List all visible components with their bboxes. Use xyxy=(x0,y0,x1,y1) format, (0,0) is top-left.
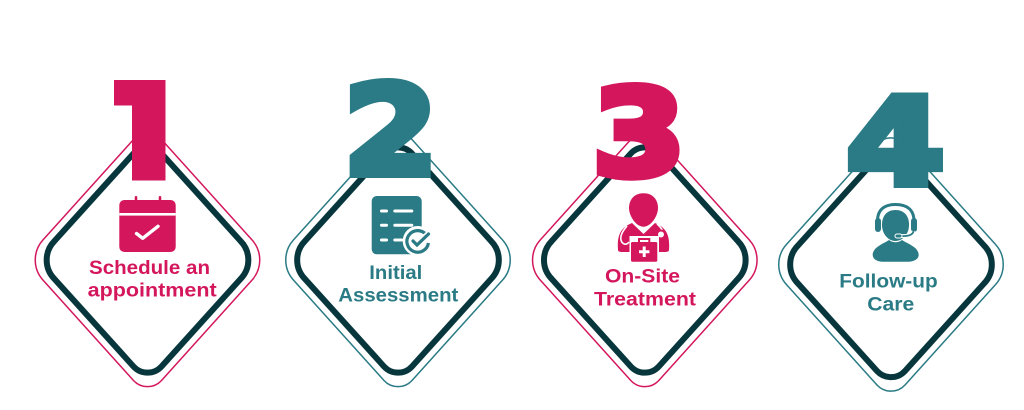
label: Follow-up Care: Care xyxy=(867,294,914,316)
diamond frame 1 xyxy=(35,133,260,387)
numeral 4: 4 xyxy=(846,72,945,212)
diamond frame 2 xyxy=(286,133,510,387)
label: Initial Assessment: Initial xyxy=(369,262,422,284)
icon: doctor with medical case xyxy=(618,193,669,263)
icon: headset agent xyxy=(873,204,919,262)
label: Initial Assessment: Assessment xyxy=(338,285,459,307)
label: Schedule an appointment: appointment xyxy=(88,280,217,302)
panel: step 3 on-site treatment xyxy=(533,65,757,387)
icon: calendar with check xyxy=(119,196,176,252)
diamond frame 4 xyxy=(779,138,1003,391)
panel: step 1 schedule an appointment xyxy=(35,55,260,387)
diamond frame 3 xyxy=(533,133,757,387)
numeral 3: 3 xyxy=(592,65,686,204)
label: Schedule an appointment: Schedule an xyxy=(89,257,210,279)
label: On-Site Treatment: On-Site xyxy=(605,266,680,288)
numeral 1 xyxy=(114,80,166,180)
numeral 2: 2 xyxy=(343,59,438,203)
icon: checklist with badge xyxy=(372,196,433,256)
panel: step 2 initial assessment xyxy=(286,59,510,387)
label: On-Site Treatment: Treatment xyxy=(594,288,697,310)
label: Follow-up Care: Follow-up xyxy=(839,270,938,292)
panel: step 4 follow-up care xyxy=(779,72,1003,391)
numeral 1: 1 xyxy=(95,55,185,207)
